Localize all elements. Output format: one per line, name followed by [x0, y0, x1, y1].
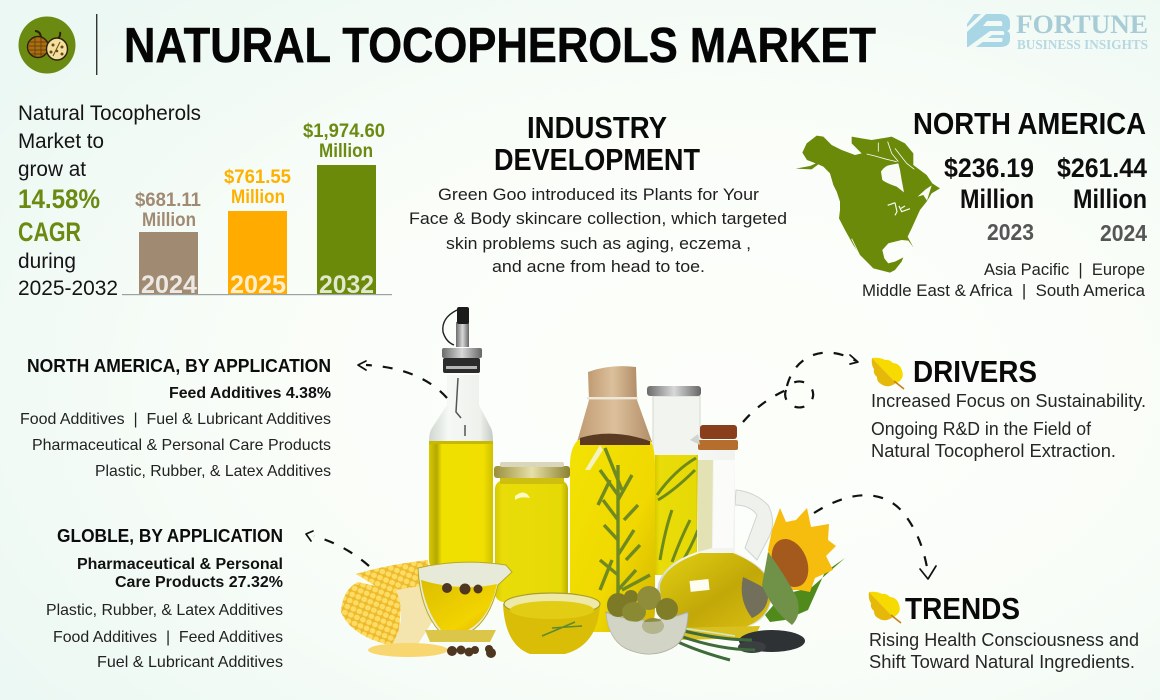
- logo: Fortune Business Insights: [967, 10, 1148, 53]
- Drivers text: [871, 391, 1146, 461]
- corn cob: [341, 560, 496, 658]
- North America by application: [20, 356, 331, 480]
- bar: 2024: Million: [142, 210, 196, 231]
- other regions: [862, 261, 1146, 300]
- arrow: to North America by application: [358, 361, 447, 398]
- CAGR text block: CAGR: [18, 217, 81, 247]
- arrow: to Global by application: [306, 531, 369, 566]
- Global by application: Fuel & Lubricant Additives: [97, 654, 283, 671]
- map: North America: [796, 136, 940, 273]
- bar: 2024: $681.11: [135, 190, 201, 211]
- Global by application: Food Additives | Feed Additives: [53, 629, 283, 646]
- Drivers text: Natural Tocopherol Extraction.: [871, 441, 1116, 461]
- Drivers heading: DRIVERS: [913, 354, 1037, 389]
- Drivers text: Increased Focus on Sustainability.: [871, 391, 1146, 411]
- bar: 2024: [135, 190, 201, 299]
- bar: 2032: 2032: [319, 271, 374, 299]
- North America 2023 value: Million: [960, 184, 1034, 214]
- title: NATURAL TOCOPHEROLS MARKET: [124, 19, 876, 73]
- bar: 2025: [224, 167, 291, 299]
- oils and plants illustration: [341, 307, 845, 660]
- bar chart: market size: [122, 121, 392, 299]
- industry development text: [409, 185, 787, 276]
- bar: 2032: Million: [319, 141, 373, 162]
- industry development text: skin problems such as aging, eczema ,: [446, 234, 751, 253]
- logo: Fortune Business Insights: BUSINESS INSIGHTS: [1017, 38, 1148, 53]
- bar: 2032: [303, 121, 385, 299]
- North America 2023 value: $236.19: [944, 153, 1034, 183]
- rosemary sprigs: [678, 628, 755, 660]
- tall bottle with paper cap: [570, 366, 655, 632]
- Drivers text: Ongoing R&D in the Field of: [871, 419, 1092, 439]
- North America by application: Feed Additives 4.38%: [169, 385, 331, 402]
- North America 2024 value: $261.44: [1057, 153, 1147, 183]
- other regions: Asia Pacific | Europe: [984, 261, 1145, 279]
- icon: Trends leaf: [869, 592, 901, 623]
- bar: 2025: Million: [231, 187, 285, 208]
- sunflower: [762, 508, 845, 625]
- back bottle: [647, 386, 701, 575]
- North America 2024 value: [1057, 153, 1147, 246]
- CAGR text block: during: [18, 249, 76, 273]
- Global by application: [46, 526, 283, 671]
- icon: Drivers leaf: [872, 358, 904, 389]
- black seeds: [738, 630, 805, 653]
- CAGR text block: grow at: [18, 157, 86, 181]
- North America 2023 value: [944, 153, 1034, 245]
- Global by application: GLOBLE, BY APPLICATION: [57, 526, 283, 546]
- bar: 2032: $1,974.60: [303, 121, 385, 142]
- jar with gold lid: [494, 462, 570, 602]
- Trends heading: TRENDS: [905, 591, 1020, 626]
- industry development text: Face & Body skincare collection, which targeted: [409, 209, 787, 228]
- bar: 2024: 2024: [141, 271, 197, 299]
- cruet with cork: [657, 425, 773, 640]
- oil bottle with pourer: [429, 307, 493, 568]
- North America by application: NORTH AMERICA, BY APPLICATION: [27, 356, 331, 376]
- logo: Fortune Business Insights: FORTUNE: [1016, 10, 1148, 39]
- Trends text: Shift Toward Natural Ingredients.: [869, 652, 1135, 672]
- Global by application: Care Products 27.32%: [115, 574, 283, 591]
- CAGR text block: [18, 101, 201, 300]
- bar: 2025: 2025: [230, 271, 286, 299]
- arrow: to Drivers: [743, 353, 858, 422]
- industry development heading: INDUSTRY: [527, 110, 667, 145]
- CAGR text block: 2025-2032: [18, 276, 118, 300]
- North America 2024 value: Million: [1073, 184, 1147, 214]
- header icon: fruit in green circle: [18, 16, 76, 74]
- North America by application: Food Additives | Fuel & Lubricant Additives: [20, 411, 331, 428]
- North America 2023 value: 2023: [987, 219, 1034, 245]
- industry development heading: DEVELOPMENT: [494, 142, 700, 177]
- North America by application: Pharmaceutical & Personal Care Products: [32, 437, 331, 454]
- header divider: [96, 14, 97, 75]
- CAGR text block: Market to: [18, 129, 104, 153]
- bar: 2025: $761.55: [224, 167, 291, 188]
- North America by application: Plastic, Rubber, & Latex Additives: [95, 463, 331, 480]
- olive bowl: [606, 586, 688, 654]
- gravy boat of oil: [418, 562, 512, 642]
- industry development text: and acne from head to toe.: [492, 257, 705, 276]
- arrow: to Trends: [814, 495, 936, 579]
- Global by application: Pharmaceutical & Personal: [77, 556, 283, 573]
- other regions: Middle East & Africa | South America: [862, 282, 1146, 300]
- Trends text: Rising Health Consciousness and: [869, 630, 1139, 650]
- industry development heading: [494, 110, 700, 177]
- glass oil bowl: [503, 593, 600, 654]
- North America 2024 value: 2024: [1100, 220, 1147, 246]
- CAGR text block: Natural Tocopherols: [18, 101, 201, 125]
- industry development text: Green Goo introduced its Plants for Your: [438, 185, 759, 204]
- Trends text: [869, 630, 1139, 672]
- CAGR text block: 14.58%: [18, 184, 100, 214]
- Global by application: Plastic, Rubber, & Latex Additives: [46, 602, 283, 619]
